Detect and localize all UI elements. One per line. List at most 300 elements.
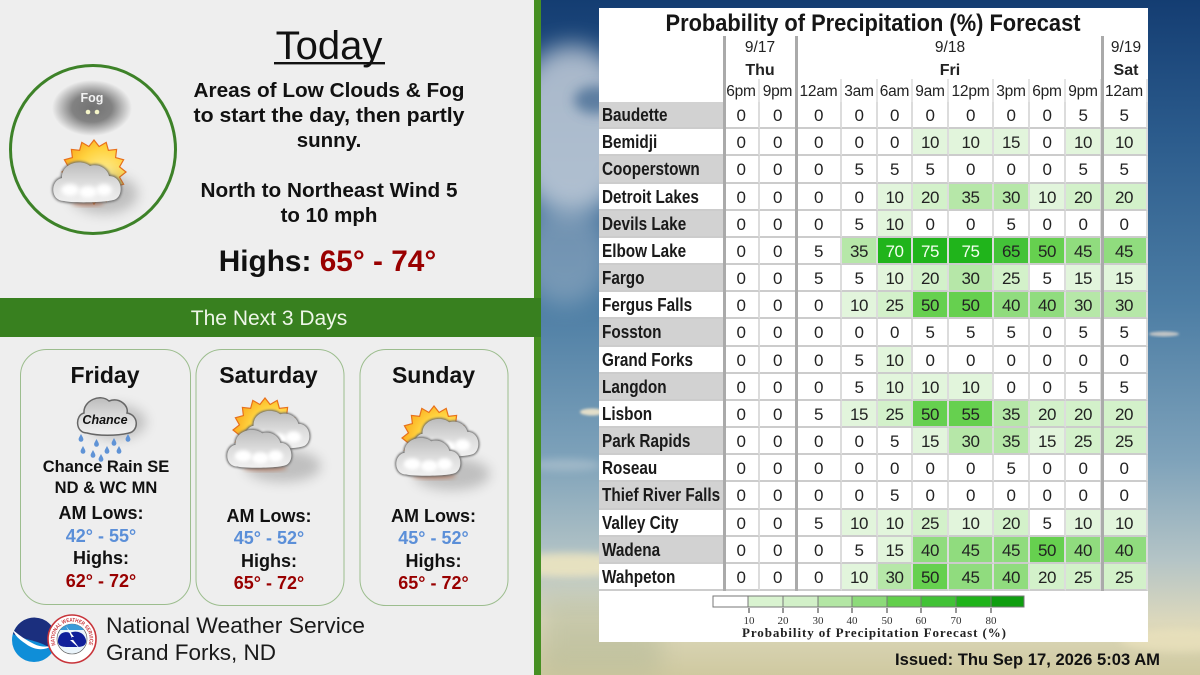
row: Detroit Lakes: 20: [1115, 188, 1133, 207]
text: National Weather Service Grand Forks: National Weather Service: [106, 613, 365, 638]
row: Elbow Lake: 45: [1074, 242, 1092, 261]
row: Devils Lake: 0: [925, 215, 935, 234]
row: Bemidji: 0: [854, 133, 864, 152]
row: Baudette: 0: [736, 106, 746, 125]
row: Fosston: 0: [736, 323, 746, 342]
row: Lisbon: 0: [773, 405, 782, 424]
row: Lisbon: 20: [1115, 405, 1133, 424]
panel: Friday: [20, 350, 190, 604]
panel: Friday: Friday: [70, 362, 140, 388]
row: Detroit Lakes: [599, 184, 1148, 211]
row: Lisbon: 55: [961, 405, 980, 424]
legend: 60: [916, 615, 927, 627]
row: Wahpeton: [599, 564, 1148, 591]
row: Park Rapids: 25: [1115, 432, 1133, 451]
row: Langdon: 0: [1006, 378, 1016, 397]
row: Langdon: 5: [854, 378, 864, 397]
row: Lisbon: Lisbon: [602, 404, 652, 424]
row: Grand Forks: 5: [854, 351, 864, 370]
row: Valley City: 0: [773, 514, 782, 533]
panel: Saturday: 45° - 52°: [234, 528, 304, 548]
text: today forecast: Areas of Low Clouds & Fog: [194, 79, 464, 102]
row: Fosston: Fosston: [602, 322, 662, 342]
text: issued time: Issued: Thu Sep 17, 2026 5:03 AM: [895, 651, 1160, 669]
row: Grand Forks: [599, 347, 1148, 374]
table date headers: Thu: [745, 62, 775, 79]
row: Cooperstown: 5: [925, 160, 935, 179]
row: Grand Forks: 0: [925, 351, 935, 370]
table date headers: 9/18: [935, 39, 965, 56]
panel: Saturday: Highs:: [241, 551, 297, 571]
row: Fergus Falls: 40: [1038, 296, 1056, 315]
row: Thief River Falls: 0: [925, 486, 935, 505]
icon: fog: Fog: [81, 91, 103, 105]
legend: 50: [882, 615, 893, 627]
legend: 70: [950, 615, 962, 627]
row: Valley City: 20: [1002, 514, 1020, 533]
row: Cooperstown: 5: [1119, 160, 1129, 179]
panel: Sunday: [360, 350, 508, 606]
row: Fargo: 30: [961, 269, 980, 288]
row: Detroit Lakes: 10: [885, 188, 904, 207]
row: Thief River Falls: 0: [966, 486, 975, 505]
row: Roseau: 0: [814, 459, 823, 478]
row: Grand Forks: 0: [773, 351, 782, 370]
panel: Friday: Chance Rain SE: [43, 458, 169, 476]
table date headers: 9/19: [1111, 39, 1141, 56]
row: Wahpeton: 0: [773, 568, 782, 587]
table hour headers: 3am: [844, 83, 874, 100]
row: Devils Lake: 5: [1006, 215, 1016, 234]
row: Valley City: 5: [1042, 514, 1052, 533]
row: Wadena: 45: [961, 541, 980, 560]
row: Park Rapids: [599, 428, 1148, 455]
table date headers: [745, 39, 1141, 79]
row: Valley City: 5: [814, 514, 823, 533]
row: Thief River Falls: [599, 482, 1148, 510]
row: Devils Lake: 0: [773, 215, 782, 234]
row: Fargo: 5: [1042, 269, 1052, 288]
row: Elbow Lake: 5: [814, 242, 823, 261]
row: Valley City: 10: [850, 514, 868, 533]
row: Detroit Lakes: 0: [736, 188, 746, 207]
row: Grand Forks: 0: [1042, 351, 1052, 370]
row: Fergus Falls: 40: [1002, 296, 1020, 315]
row: Fosston: 5: [966, 323, 975, 342]
row: Cooperstown: 5: [854, 160, 864, 179]
row: Elbow Lake: 75: [921, 242, 939, 261]
row: Wadena: 0: [736, 541, 746, 560]
row: Fosston: [599, 319, 1148, 347]
icon: partly sunny: [53, 140, 138, 214]
row: Fergus Falls: 50: [921, 296, 939, 315]
row: Thief River Falls: 0: [1006, 486, 1016, 505]
icon: partly sunny: [227, 398, 321, 482]
row: Park Rapids: 25: [1074, 432, 1092, 451]
icon: NWS logo: [47, 614, 97, 664]
row: Wahpeton: 0: [736, 568, 746, 587]
row: Bemidji: 10: [1115, 133, 1133, 152]
row: Lisbon: 5: [814, 405, 823, 424]
table hour headers: 6am: [880, 83, 909, 100]
table hour headers: 9pm: [1068, 83, 1098, 100]
text: today forecast: to start the day, then partly: [194, 104, 465, 127]
row: Thief River Falls: 0: [773, 486, 782, 505]
row: Roseau: 0: [890, 459, 899, 478]
row: Fergus Falls: 0: [773, 296, 782, 315]
row: Fargo: 25: [1002, 269, 1020, 288]
row: Langdon: 10: [885, 378, 904, 397]
table hour headers: 12am: [1105, 83, 1143, 100]
row: Wadena: 45: [1002, 541, 1020, 560]
row: Wadena: Wadena: [602, 540, 660, 560]
row: Valley City: 0: [736, 514, 746, 533]
row: Cooperstown: [599, 156, 1148, 184]
row: Devils Lake: 0: [966, 215, 975, 234]
row: Roseau: 0: [1078, 459, 1088, 478]
row: Grand Forks: 0: [1119, 351, 1129, 370]
row: Devils Lake: [599, 211, 1148, 238]
row: Detroit Lakes: 0: [773, 188, 782, 207]
row: Roseau: 5: [1006, 459, 1016, 478]
row: Thief River Falls: 0: [854, 486, 864, 505]
row: Baudette: 0: [925, 106, 935, 125]
banner: the next 3 days: The Next 3 Days: [191, 307, 347, 330]
table hour headers: 12am: [800, 83, 837, 100]
row: Wadena: [599, 537, 1148, 564]
row: Cooperstown: 5: [1078, 160, 1088, 179]
background: sky: [500, 0, 1200, 675]
row: Baudette: Baudette: [602, 105, 667, 125]
row: Wahpeton: 25: [1115, 568, 1133, 587]
legend: 30: [812, 615, 824, 627]
icon: chance of rain: Chance: [82, 413, 128, 427]
row: Park Rapids: 5: [890, 432, 899, 451]
row: Bemidji: 15: [1002, 133, 1020, 152]
row: Fargo: 5: [814, 269, 823, 288]
row: Langdon: 10: [921, 378, 939, 397]
row: Lisbon: 35: [1002, 405, 1020, 424]
row: Devils Lake: 0: [736, 215, 746, 234]
panel: Saturday: Saturday: [219, 362, 318, 388]
legend: 20: [778, 615, 789, 627]
row: Fargo: 0: [773, 269, 782, 288]
row: Fosston: 0: [854, 323, 864, 342]
row: Cooperstown: 0: [1006, 160, 1016, 179]
row: Fergus Falls: 0: [814, 296, 823, 315]
row: Detroit Lakes: 35: [961, 188, 980, 207]
row: Bemidji: 0: [736, 133, 746, 152]
row: Detroit Lakes: Detroit Lakes: [602, 187, 699, 207]
row: Park Rapids: 0: [814, 432, 823, 451]
text: today forecast: to 10 mph: [281, 204, 377, 227]
row: Park Rapids: 0: [773, 432, 782, 451]
row: Baudette: [599, 102, 1148, 129]
row: Langdon: 5: [1119, 378, 1129, 397]
panel: Saturday: AM Lows:: [226, 506, 312, 526]
row: Wahpeton: 25: [1074, 568, 1092, 587]
row: Elbow Lake: 35: [850, 242, 868, 261]
table date headers: Fri: [940, 62, 960, 79]
chart title: Probability of Precipitation (%) Forecast: [666, 10, 1080, 37]
row: Elbow Lake: [599, 238, 1148, 265]
row: Lisbon: [599, 401, 1148, 428]
row: Roseau: 0: [925, 459, 935, 478]
row: Park Rapids: 15: [1038, 432, 1056, 451]
row: Elbow Lake: 75: [961, 242, 980, 261]
row: Fargo: 10: [885, 269, 904, 288]
row: Fargo: 20: [921, 269, 939, 288]
text: National Weather Service Grand Forks: Grand Forks, ND: [106, 640, 276, 665]
row: Detroit Lakes: 10: [1038, 188, 1056, 207]
row: Wahpeton: 0: [814, 568, 823, 587]
row: Baudette: 0: [890, 106, 899, 125]
row: Wadena: 15: [885, 541, 904, 560]
row: Thief River Falls: 0: [736, 486, 746, 505]
row: Lisbon: 20: [1038, 405, 1056, 424]
row: Lisbon: 25: [885, 405, 904, 424]
row: Elbow Lake: 0: [773, 242, 782, 261]
row: Devils Lake: 0: [1078, 215, 1088, 234]
banner: the next 3 days: [0, 298, 541, 337]
row: Fergus Falls: 0: [736, 296, 746, 315]
row: Detroit Lakes: 0: [854, 188, 864, 207]
text: today highs: Highs: 65° - 74°: [219, 245, 436, 278]
row: Fargo: 15: [1074, 269, 1092, 288]
row: Detroit Lakes: 30: [1002, 188, 1020, 207]
table hour headers: 9pm: [763, 83, 792, 100]
table date headers: 9/17: [745, 39, 775, 56]
row: Elbow Lake: Elbow Lake: [602, 241, 686, 261]
row: Grand Forks: 0: [1078, 351, 1088, 370]
row: Thief River Falls: Thief River Falls: [602, 485, 720, 505]
row: Fergus Falls: 25: [885, 296, 904, 315]
row: Cooperstown: 0: [814, 160, 823, 179]
table date headers: Sat: [1114, 62, 1139, 79]
row: Baudette: 5: [1078, 106, 1088, 125]
row: Langdon: 10: [961, 378, 980, 397]
text: today forecast: North to Northeast Wind 5: [200, 179, 458, 202]
panel: Friday: AM Lows:: [58, 503, 144, 523]
row: Lisbon: 50: [921, 405, 939, 424]
row: Park Rapids: 0: [736, 432, 746, 451]
panel: left forecast background: [0, 0, 541, 675]
row: Grand Forks: Grand Forks: [602, 350, 693, 370]
row: Fergus Falls: [599, 292, 1148, 319]
row: Fosston: 5: [1078, 323, 1088, 342]
row: Cooperstown: 0: [1042, 160, 1052, 179]
row: Fergus Falls: 30: [1074, 296, 1092, 315]
row: Wahpeton: 30: [885, 568, 904, 587]
panel: Sunday: 45° - 52°: [398, 528, 469, 548]
row: Roseau: 0: [1119, 459, 1129, 478]
row: Thief River Falls: 0: [1119, 486, 1129, 505]
row: Bemidji: Bemidji: [602, 132, 657, 152]
row: Devils Lake: 5: [854, 215, 864, 234]
row: Devils Lake: Devils Lake: [602, 214, 686, 234]
row: Devils Lake: 0: [1042, 215, 1052, 234]
row: Bemidji: 0: [1042, 133, 1052, 152]
row: Valley City: 10: [961, 514, 980, 533]
row: Wadena: 0: [814, 541, 823, 560]
row: Park Rapids: 30: [961, 432, 980, 451]
icon: partly sunny: [396, 406, 490, 490]
panel: Friday: Highs:: [73, 548, 129, 568]
row: Cooperstown: 5: [890, 160, 899, 179]
row: Thief River Falls: 0: [814, 486, 823, 505]
row: Grand Forks: 0: [966, 351, 975, 370]
panel: forecast table background: [599, 8, 1148, 642]
panel: Sunday: Sunday: [392, 362, 475, 388]
row: Baudette: 0: [773, 106, 782, 125]
row: Park Rapids: 0: [854, 432, 864, 451]
row: Thief River Falls: 0: [1042, 486, 1052, 505]
row: Devils Lake: 0: [814, 215, 823, 234]
row: Fergus Falls: 10: [850, 296, 868, 315]
row: Wahpeton: 50: [921, 568, 939, 587]
row: Fergus Falls: 50: [961, 296, 980, 315]
row: Thief River Falls: 0: [1078, 486, 1088, 505]
row: Roseau: 0: [736, 459, 746, 478]
row: Wahpeton: 40: [1002, 568, 1020, 587]
icon: NWS logo: NATIONAL WEATHER SERVICE: [50, 618, 94, 646]
text: National Weather Service Grand Forks: [106, 613, 365, 665]
panel: Sunday: 65° - 72°: [398, 573, 469, 593]
row: Detroit Lakes: 20: [1074, 188, 1092, 207]
row: Fosston: 0: [773, 323, 782, 342]
row: Devils Lake: 10: [885, 215, 904, 234]
legend: 10: [744, 615, 755, 627]
row: Elbow Lake: 0: [736, 242, 746, 261]
table hour headers: 3pm: [996, 83, 1026, 100]
table: precipitation probabilities by city: [599, 102, 1148, 591]
row: Valley City: 10: [1115, 514, 1133, 533]
row: Park Rapids: Park Rapids: [602, 431, 690, 451]
row: Fosston: 0: [814, 323, 823, 342]
row: Elbow Lake: 70: [885, 242, 904, 261]
row: Baudette: 0: [854, 106, 864, 125]
icon: fog: [52, 80, 132, 136]
row: Wadena: 50: [1038, 541, 1056, 560]
panel: Friday: 62° - 72°: [66, 571, 136, 591]
row: Langdon: 5: [1078, 378, 1088, 397]
row: Valley City: 10: [885, 514, 904, 533]
row: Fargo: 0: [736, 269, 746, 288]
heading: Today: Today: [276, 24, 382, 68]
row: Grand Forks: 10: [885, 351, 904, 370]
row: Wadena: 5: [854, 541, 864, 560]
row: Langdon: 0: [814, 378, 823, 397]
legend: 40: [846, 615, 858, 627]
row: Fergus Falls: 30: [1115, 296, 1133, 315]
row: Fosston: 5: [1119, 323, 1129, 342]
row: Baudette: 5: [1119, 106, 1129, 125]
row: Bemidji: 10: [921, 133, 939, 152]
row: Park Rapids: 35: [1002, 432, 1020, 451]
row: Roseau: Roseau: [602, 458, 657, 478]
row: Roseau: 0: [773, 459, 782, 478]
row: Langdon: 0: [736, 378, 746, 397]
legend: Probability of Precipitation Forecast (%): [742, 625, 1006, 640]
table hour headers: 6pm: [1032, 83, 1062, 100]
row: Thief River Falls: 5: [890, 486, 899, 505]
table hour headers: [726, 79, 1148, 102]
today icon circle: [10, 66, 176, 234]
row: Fargo: 5: [854, 269, 864, 288]
row: Bemidji: 0: [773, 133, 782, 152]
row: Wadena: 0: [773, 541, 782, 560]
row: Fosston: 0: [1042, 323, 1052, 342]
legend: [713, 596, 1024, 640]
row: Cooperstown: 0: [966, 160, 975, 179]
row: Detroit Lakes: 20: [921, 188, 939, 207]
row: Wadena: 40: [1074, 541, 1092, 560]
row: Cooperstown: 0: [773, 160, 782, 179]
row: Lisbon: 15: [850, 405, 868, 424]
row: Fargo: Fargo: [602, 268, 645, 288]
row: Baudette: 0: [814, 106, 823, 125]
row: Elbow Lake: 50: [1038, 242, 1056, 261]
table hour headers: 9am: [915, 83, 945, 100]
row: Langdon: [599, 374, 1148, 401]
panel: Saturday: 65° - 72°: [234, 573, 304, 593]
row: Grand Forks: 0: [736, 351, 746, 370]
row: Wahpeton: Wahpeton: [602, 567, 675, 587]
row: Langdon: 0: [773, 378, 782, 397]
row: Valley City: [599, 510, 1148, 537]
row: Elbow Lake: 45: [1115, 242, 1133, 261]
row: Baudette: 0: [1006, 106, 1016, 125]
row: Roseau: 0: [1042, 459, 1052, 478]
panel: Sunday: Highs:: [406, 551, 462, 571]
icon: chance of rain: [78, 398, 146, 462]
row: Devils Lake: 0: [1119, 215, 1129, 234]
row: Detroit Lakes: 0: [814, 188, 823, 207]
row: Cooperstown: Cooperstown: [602, 159, 700, 179]
row: Roseau: 0: [966, 459, 975, 478]
row: Valley City: 25: [921, 514, 939, 533]
row: Wahpeton: 45: [961, 568, 980, 587]
row: Wahpeton: 10: [850, 568, 868, 587]
legend: 80: [986, 615, 997, 627]
row: Langdon: Langdon: [602, 377, 667, 397]
row: Baudette: 0: [1042, 106, 1052, 125]
row: Bemidji: 0: [814, 133, 823, 152]
row: Cooperstown: 0: [736, 160, 746, 179]
row: Langdon: 0: [1042, 378, 1052, 397]
row: Fergus Falls: Fergus Falls: [602, 295, 692, 315]
panel: Friday: ND & WC MN: [55, 479, 157, 497]
row: Grand Forks: 0: [814, 351, 823, 370]
row: Fosston: 5: [1006, 323, 1016, 342]
row: Wadena: 40: [1115, 541, 1133, 560]
row: Baudette: 0: [966, 106, 975, 125]
row: Fosston: 0: [890, 323, 899, 342]
icon: NOAA logo: [12, 618, 56, 662]
row: Fargo: 15: [1115, 269, 1133, 288]
panel: Saturday: [196, 350, 344, 606]
row: Lisbon: 0: [736, 405, 746, 424]
row: Roseau: [599, 455, 1148, 482]
row: Fosston: 5: [925, 323, 935, 342]
text: today forecast: [194, 79, 465, 227]
row: Valley City: 10: [1074, 514, 1092, 533]
row: Bemidji: [599, 129, 1148, 156]
row: Wadena: 40: [921, 541, 939, 560]
table hour headers: 6pm: [726, 83, 756, 100]
row: Fargo: [599, 265, 1148, 292]
row: Elbow Lake: 65: [1002, 242, 1020, 261]
